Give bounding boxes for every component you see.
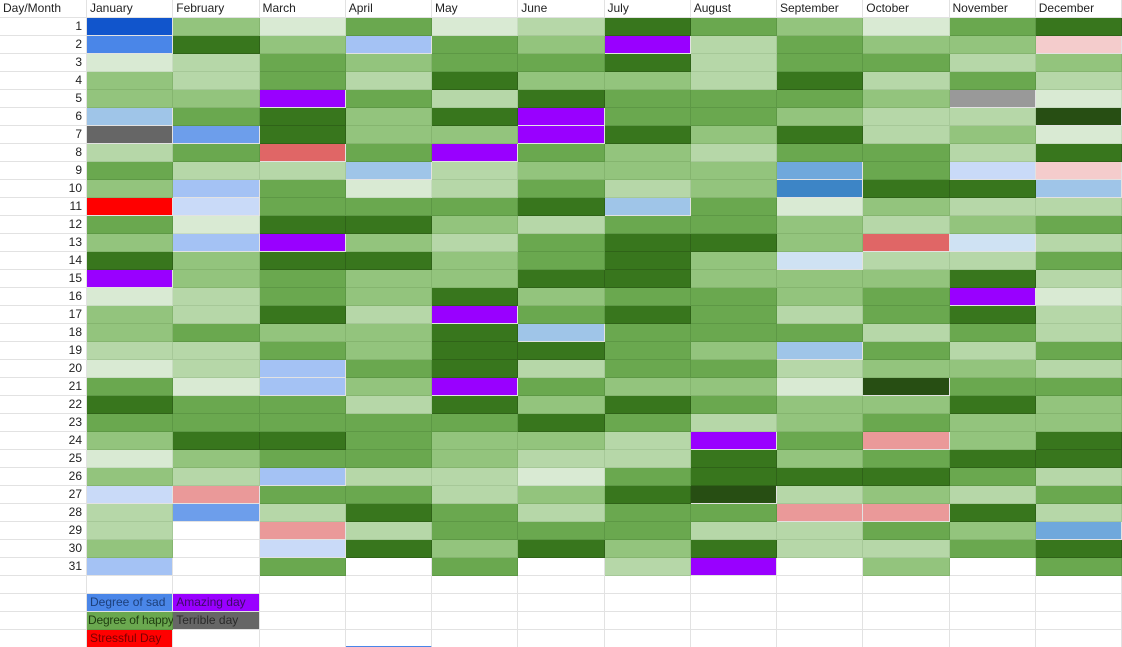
mood grid: 2 xyxy=(75,37,82,51)
mood grid: 18 xyxy=(69,325,82,339)
mood grid: 30 xyxy=(69,541,82,555)
legend: Terrible day xyxy=(176,613,238,627)
header row: September xyxy=(780,1,839,15)
mood grid: 28 xyxy=(69,505,82,519)
header row: June xyxy=(521,1,547,15)
mood grid: 23 xyxy=(69,415,82,429)
header row: May xyxy=(435,1,458,15)
mood grid: 16 xyxy=(69,289,82,303)
header row: July xyxy=(608,1,629,15)
mood grid: 24 xyxy=(69,433,82,447)
mood grid: 14 xyxy=(69,253,82,267)
header row: December xyxy=(1039,1,1094,15)
header row: October xyxy=(866,1,909,15)
legend xyxy=(0,594,1122,647)
mood grid: 3 xyxy=(75,55,82,69)
mood grid: 8 xyxy=(75,145,82,159)
legend: Amazing day xyxy=(176,595,246,609)
header row: August xyxy=(694,1,731,15)
mood grid: 12 xyxy=(69,217,82,231)
header row: March xyxy=(262,1,296,15)
header row: February xyxy=(176,1,224,15)
mood grid: 11 xyxy=(70,199,82,213)
header row: Day/Month xyxy=(3,1,61,15)
mood grid: 20 xyxy=(69,361,82,375)
mood grid: 13 xyxy=(69,235,82,249)
mood grid: 10 xyxy=(69,181,82,195)
legend: Stressful Day xyxy=(90,631,161,645)
mood grid: 21 xyxy=(69,379,82,393)
header row: November xyxy=(952,1,1008,15)
mood grid: 1 xyxy=(75,19,82,33)
mood grid: 22 xyxy=(69,397,82,411)
mood grid: 27 xyxy=(69,487,82,501)
mood grid: 7 xyxy=(75,127,82,141)
mood grid: 31 xyxy=(69,559,82,573)
header row: January xyxy=(90,1,133,15)
mood grid: 19 xyxy=(69,343,82,357)
legend: Degree of sad xyxy=(90,595,165,609)
mood grid: 17 xyxy=(69,307,82,321)
mood grid: 26 xyxy=(69,469,82,483)
legend: Degree of happy xyxy=(88,613,174,627)
mood grid: 6 xyxy=(75,109,82,123)
mood grid: 5 xyxy=(75,91,82,105)
mood grid: 15 xyxy=(69,271,82,285)
mood grid: 4 xyxy=(75,73,82,87)
mood grid: 29 xyxy=(69,523,82,537)
mood grid: 9 xyxy=(75,163,82,177)
header row xyxy=(0,0,1122,18)
header row: April xyxy=(349,1,373,15)
mood grid: 25 xyxy=(69,451,82,465)
